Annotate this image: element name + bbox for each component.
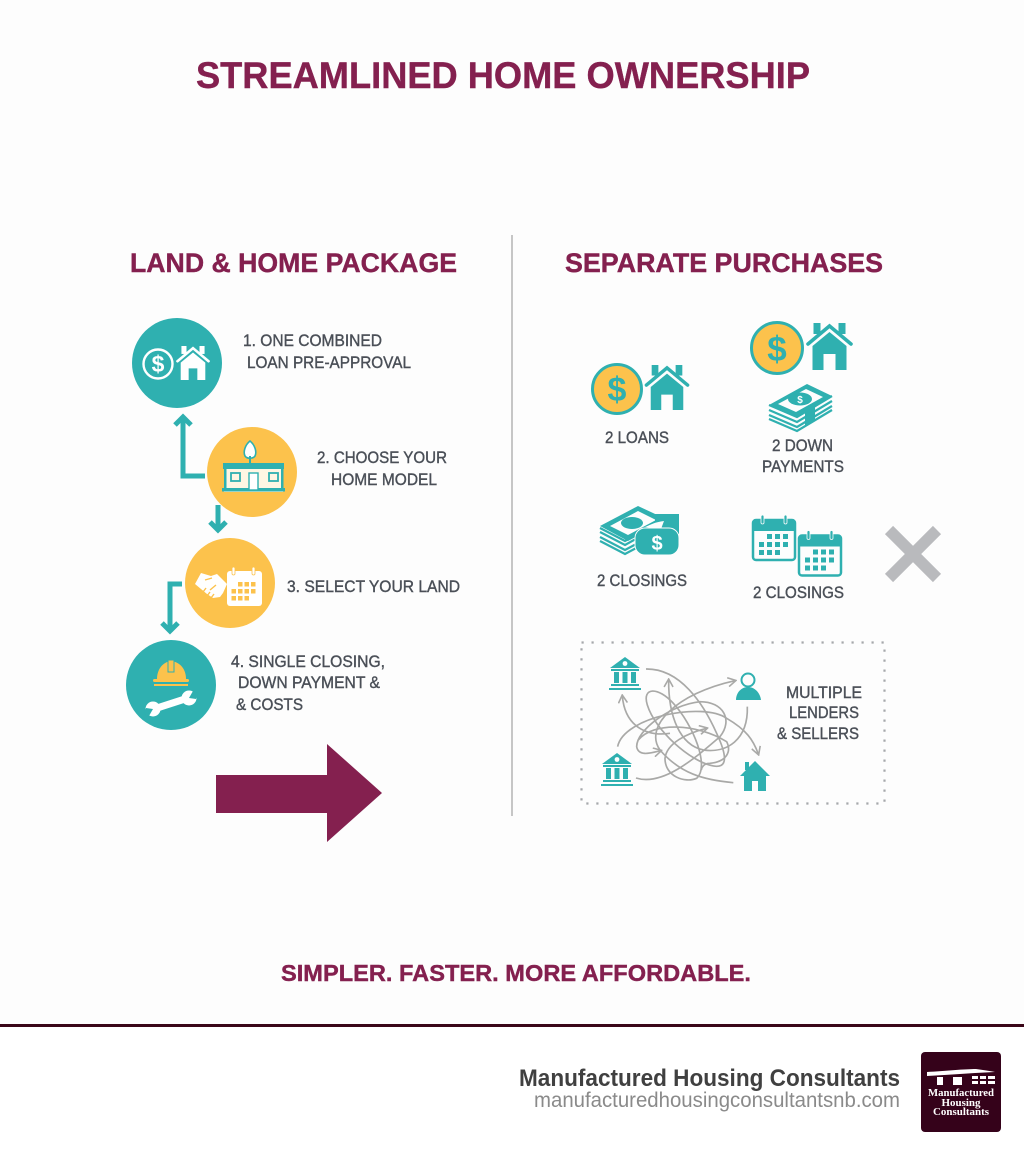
step 1 label	[243, 331, 411, 372]
step 2 label: 2. CHOOSE YOUR	[317, 448, 447, 467]
step 4 label: & COSTS	[236, 695, 303, 714]
step 4 label	[231, 652, 385, 714]
label: 2 down payments: 2 DOWN	[772, 436, 833, 455]
step 3 label: 3. SELECT YOUR LAND	[287, 577, 460, 596]
icon: two calendars	[753, 515, 841, 576]
label: multiple lenders and sellers: & SELLERS	[777, 724, 859, 743]
icon: tangle of arrows	[618, 669, 758, 783]
step 4 label: 4. SINGLE CLOSING,	[231, 652, 385, 671]
label: 2 loans: 2 LOANS	[605, 428, 669, 447]
panel: multiple lenders and sellers	[582, 642, 884, 804]
icon: grey cross	[889, 530, 937, 578]
label: multiple lenders and sellers	[777, 683, 862, 743]
icon: down payment coin and house	[752, 322, 851, 374]
step 1: combined loan pre-approval: $	[152, 351, 165, 377]
icon: loan coin and house: $	[608, 371, 627, 409]
icon: person	[736, 674, 761, 700]
big arrow	[216, 744, 382, 842]
arrow: step 2 to step 1	[175, 417, 205, 476]
label: 2 closings, right: 2 CLOSINGS	[753, 583, 844, 602]
tagline: SIMPLER. FASTER. MORE AFFORDABLE.	[281, 960, 751, 986]
step 2 label	[317, 448, 447, 489]
heading: separate purchases: SEPARATE PURCHASES	[565, 248, 883, 278]
panel: land and home package steps	[126, 318, 460, 842]
step 4 label: DOWN PAYMENT &	[238, 673, 381, 692]
step 1: combined loan pre-approval	[132, 318, 222, 408]
logo: Housing	[942, 1098, 980, 1109]
icon: bank bottom	[601, 753, 633, 786]
label: 2 closings, left: 2 CLOSINGS	[597, 571, 687, 590]
step 2 label: HOME MODEL	[331, 470, 437, 489]
icon: down payment coin and house: $	[767, 330, 787, 369]
icon: cash and money bag: $	[651, 533, 663, 555]
label: 2 down payments: PAYMENTS	[762, 457, 844, 476]
step 2: choose home model	[207, 427, 297, 517]
step 1 label: LOAN PRE-APPROVAL	[247, 353, 411, 372]
label: 2 down payments	[762, 436, 844, 476]
icon: money stack: $	[797, 395, 803, 406]
label: multiple lenders and sellers: LENDERS	[789, 703, 859, 722]
logo	[921, 1052, 1001, 1132]
logo: Manufactured	[928, 1088, 994, 1099]
arrow: step 2 to step 3	[210, 505, 226, 530]
step 1 label: 1. ONE COMBINED	[243, 331, 382, 350]
panel: separate purchases items	[582, 322, 937, 804]
arrow: step 3 to step 4	[162, 584, 182, 631]
company name: Manufactured Housing Consultants	[519, 1065, 900, 1092]
icon: loan coin and house	[592, 364, 688, 414]
icon: cash and money bag	[600, 506, 679, 555]
step 4: single closing	[126, 640, 216, 730]
website: manufacturedhousingconsultantsnb.com	[534, 1089, 900, 1112]
icon: money stack	[769, 384, 832, 431]
title: STREAMLINED HOME OWNERSHIP	[196, 55, 810, 96]
step 3: select land	[185, 538, 275, 628]
logo: Consultants	[933, 1107, 989, 1118]
icon: bank top	[609, 657, 641, 690]
heading: land and home package: LAND & HOME PACKAGE	[130, 248, 457, 278]
label: multiple lenders and sellers: MULTIPLE	[786, 683, 862, 702]
icon: house	[740, 761, 770, 791]
footer	[0, 1024, 1024, 1154]
